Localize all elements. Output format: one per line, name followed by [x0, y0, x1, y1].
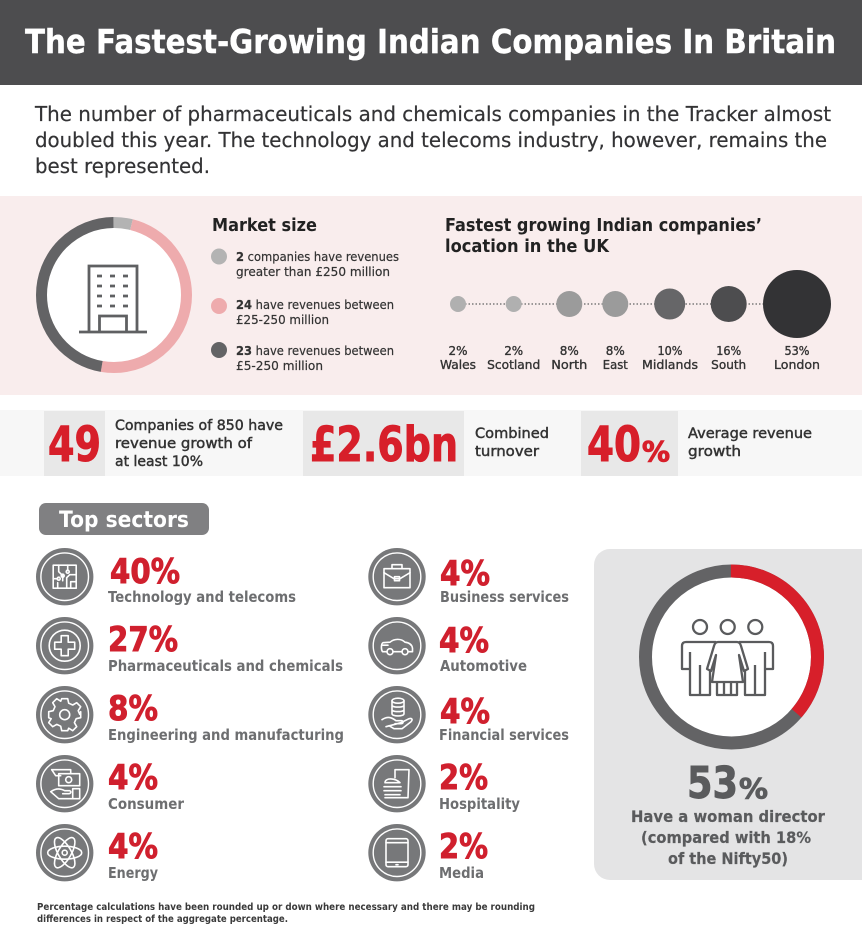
legend: market size: [211, 248, 399, 373]
sector: financial services: 4%: [440, 692, 490, 732]
legend: market size: £25-250 million: [236, 313, 329, 327]
bubble chart: UK locations: North: [551, 358, 587, 372]
stat: combined turnover: £2.6bn: [310, 417, 458, 473]
text: woman director caption: of the Nifty50): [668, 849, 788, 868]
sector: media: Media: [439, 864, 484, 882]
sector: hospitality: Hospitality: [439, 795, 520, 813]
heading: location: Fastest growing Indian companies’: [445, 215, 762, 236]
intro text: best represented.: [35, 154, 210, 178]
text: woman director caption: [631, 807, 825, 868]
stat: 49 companies: Companies of 850 have: [115, 418, 283, 434]
stat: 49 companies: [44, 411, 283, 476]
title banner: [0, 0, 862, 85]
bubble chart: UK locations: 8%: [560, 344, 579, 358]
bubble chart: UK locations: 53%: [784, 344, 810, 358]
bubble chart: UK locations: 10%: [658, 344, 682, 358]
stat: 49 companies: at least 10%: [115, 454, 203, 470]
heading: market size: Market size: [212, 215, 317, 236]
intro text: doubled this year. The technology and telecoms industry, however, remains the: [35, 128, 827, 152]
footnote: [37, 902, 535, 925]
bubble chart: UK locations: 2%: [448, 344, 468, 358]
bubble chart: UK locations: East: [603, 358, 628, 372]
sector: hospitality: 2%: [439, 758, 488, 798]
legend: market size: 24 have revenues between: [236, 298, 394, 312]
icon: three people: [682, 620, 773, 695]
sector: automotive: 4%: [439, 621, 489, 661]
bubble chart: UK locations: 2%: [504, 344, 523, 358]
bubble chart: UK locations: South: [711, 358, 746, 372]
sector: pharmaceuticals and chemicals: Pharmaceuticals and chemicals: [108, 657, 343, 675]
stat: 49 companies: revenue growth of: [115, 436, 253, 452]
sector: automotive: [368, 617, 527, 675]
panel: market size and location: [0, 196, 862, 395]
sector: business services: Business services: [440, 588, 569, 606]
icon: office building: [79, 266, 147, 332]
legend: market size: £5-250 million: [236, 359, 323, 373]
intro text: [34, 102, 831, 178]
legend: market size: 23 have revenues between: [236, 344, 394, 358]
sector: pharmaceuticals and chemicals: [36, 617, 343, 675]
footnote: Percentage calculations have been rounded up or down where necessary and there may be rounding: [37, 902, 535, 913]
stat: combined turnover: Combined: [475, 426, 549, 442]
bubble chart: UK locations: Midlands: [642, 358, 698, 372]
sector: pharmaceuticals and chemicals: 27%: [108, 620, 178, 660]
sector: technology and telecoms: [36, 548, 296, 606]
sector: consumer: Consumer: [108, 795, 185, 813]
bubble chart: UK locations: London: [774, 358, 820, 372]
stat: average revenue growth: [581, 411, 812, 476]
sector: energy: [36, 824, 158, 882]
icon: tablet: [368, 824, 426, 881]
stat: average revenue growth: growth: [688, 444, 741, 460]
sector: consumer: 4%: [108, 758, 158, 798]
stat: 53%: %: [739, 772, 768, 805]
icon: gear: [36, 686, 93, 743]
stat: average revenue growth: %: [642, 435, 670, 468]
donut chart: woman director: [646, 571, 818, 743]
icon: car: [368, 617, 426, 674]
sector: financial services: Financial services: [439, 726, 569, 744]
heading: top sectors: [39, 503, 209, 535]
bubble chart: UK locations: Scotland: [487, 358, 540, 372]
sector: consumer: [36, 755, 185, 813]
legend: market size: greater than £250 million: [236, 265, 390, 279]
sector: automotive: Automotive: [440, 657, 527, 675]
icon: hand with banknotes: [36, 755, 93, 812]
icon: briefcase: [368, 548, 426, 605]
stat: average revenue growth: 40: [587, 417, 641, 473]
text: woman director caption: (compared with 18%: [641, 828, 811, 847]
sector: technology and telecoms: Technology and telecoms: [108, 588, 296, 606]
icon: hand with coins: [368, 686, 426, 743]
footnote: differences in respect of the aggregate percentage.: [37, 914, 288, 925]
sector: financial services: [368, 686, 569, 744]
bubble chart: UK locations: Wales: [440, 358, 476, 372]
bubble chart: UK locations: [440, 270, 831, 372]
bubble chart: UK locations: 8%: [606, 344, 625, 358]
sector: engineering and manufacturing: Engineering and manufacturing: [108, 726, 344, 744]
panel: key statistics: [0, 410, 862, 476]
panel: woman director: [594, 549, 862, 880]
intro text: The number of pharmaceuticals and chemicals companies in the Tracker almost: [34, 102, 831, 126]
sector: business services: [368, 548, 569, 606]
icon: circuit board: [36, 548, 93, 605]
text: woman director caption: Have a woman director: [631, 807, 825, 826]
sector: engineering and manufacturing: 8%: [108, 689, 158, 729]
stat: 53%: 53: [687, 758, 738, 809]
sector: technology and telecoms: 40%: [110, 552, 180, 592]
sector: business services: 4%: [440, 554, 490, 594]
icon: burger and drink: [368, 755, 426, 812]
sector: energy: Energy: [108, 864, 158, 882]
sector: media: [368, 824, 488, 882]
heading: top sectors: Top sectors: [59, 508, 189, 533]
bubble chart: UK locations: 16%: [716, 344, 741, 358]
sector: hospitality: [368, 755, 520, 813]
icon: atom: [36, 824, 93, 881]
sector: engineering and manufacturing: [36, 686, 344, 744]
sector: media: 2%: [439, 827, 488, 867]
heading: location: [445, 215, 762, 257]
icon: medical cross: [36, 617, 93, 674]
sector: energy: 4%: [108, 827, 158, 867]
stat: average revenue growth: Average revenue: [688, 426, 812, 442]
stat: combined turnover: turnover: [475, 444, 539, 460]
heading: location: location in the UK: [445, 236, 610, 257]
stat: combined turnover: [303, 411, 549, 476]
legend: market size: 2 companies have revenues: [236, 250, 399, 264]
stat: 49 companies: 49: [48, 417, 101, 473]
market size donut chart: [42, 222, 186, 368]
